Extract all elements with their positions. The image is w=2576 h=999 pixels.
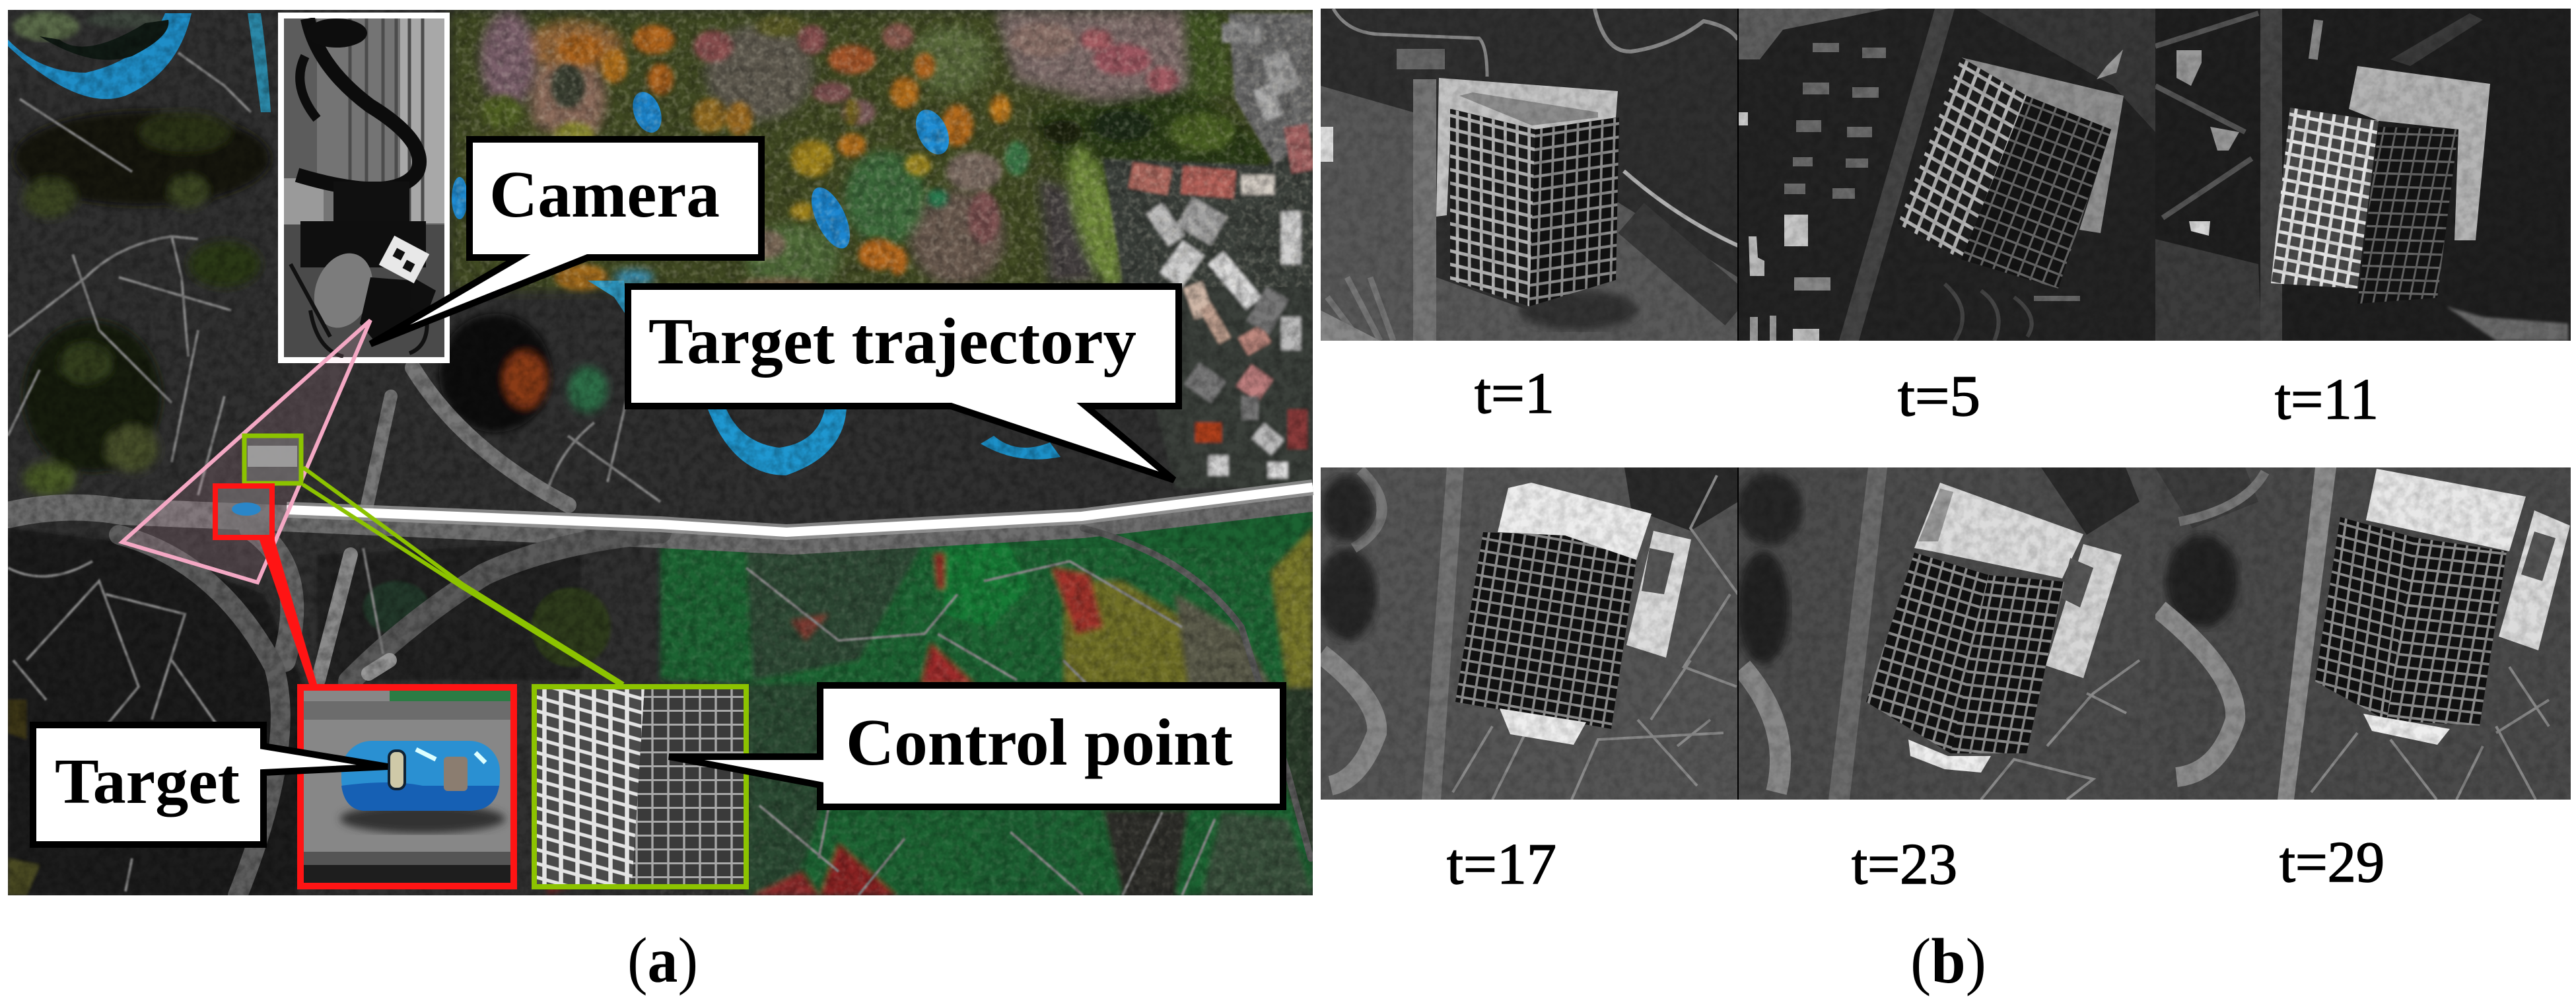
callout: Target bbox=[33, 725, 388, 844]
texture overlay bbox=[8, 10, 1313, 895]
frame t=23 bbox=[1737, 467, 2155, 800]
panel a: model scene with annotations bbox=[8, 10, 1315, 895]
caption (b): (b) bbox=[1910, 926, 1986, 997]
target trajectory line bbox=[287, 487, 1313, 532]
equipment and cables bbox=[284, 18, 444, 357]
texture overlay on frames bbox=[1321, 9, 2571, 800]
callout: Camera bbox=[370, 139, 761, 344]
inset: camera photo bbox=[281, 15, 447, 361]
big green box: control point grid zoom bbox=[534, 687, 746, 887]
label t=29: t=29 bbox=[2280, 831, 2385, 895]
car bbox=[341, 741, 500, 811]
callout: Control point: Control point bbox=[846, 705, 1233, 779]
callout: Target trajectory bbox=[628, 287, 1179, 480]
divider bbox=[1737, 467, 1739, 800]
frame t=5 bbox=[1739, 9, 2155, 341]
frame t=17 bbox=[1317, 467, 1738, 800]
label t=5: t=5 bbox=[1898, 364, 1980, 429]
landscape flower clumps bbox=[482, 16, 1235, 291]
roads bbox=[8, 368, 1313, 895]
label t=11: t=11 bbox=[2275, 368, 2379, 432]
frame t=11 bbox=[2155, 9, 2571, 341]
green connector lines bbox=[303, 467, 623, 684]
thin paths network bbox=[8, 53, 1215, 895]
callout: Target trajectory: Target trajectory bbox=[648, 304, 1136, 378]
lakes and ponds bbox=[8, 13, 1061, 475]
camera field of view triangle bbox=[122, 320, 370, 582]
frame labels bbox=[1447, 362, 2385, 897]
callout: Control point bbox=[669, 685, 1283, 807]
left lower dark ground bbox=[8, 528, 611, 895]
frame t=1 bbox=[1321, 9, 1738, 341]
label t=1: t=1 bbox=[1475, 362, 1554, 426]
colourful landscape base bbox=[450, 10, 1313, 293]
big red box: target car zoom bbox=[297, 684, 517, 889]
dark trees left bbox=[13, 111, 654, 495]
callout: Camera: Camera bbox=[489, 157, 720, 231]
label t=23: t=23 bbox=[1852, 833, 1957, 897]
aerial scene photo bbox=[8, 10, 1315, 895]
panel b: frame sequence bbox=[1317, 9, 2571, 897]
top-left corner colours bbox=[13, 12, 165, 41]
frame t=29 bbox=[2155, 467, 2571, 800]
label t=17: t=17 bbox=[1447, 833, 1556, 897]
callout: Target: Target bbox=[55, 746, 240, 817]
lower right fields bbox=[541, 502, 1313, 895]
small green control point box bbox=[244, 436, 301, 483]
curtain bbox=[317, 18, 444, 230]
small red target box bbox=[215, 486, 272, 537]
red connector wedge bbox=[259, 538, 317, 684]
buildings area bbox=[1103, 13, 1315, 489]
caption (a): (a) bbox=[627, 925, 698, 996]
divider bbox=[1737, 9, 1739, 341]
